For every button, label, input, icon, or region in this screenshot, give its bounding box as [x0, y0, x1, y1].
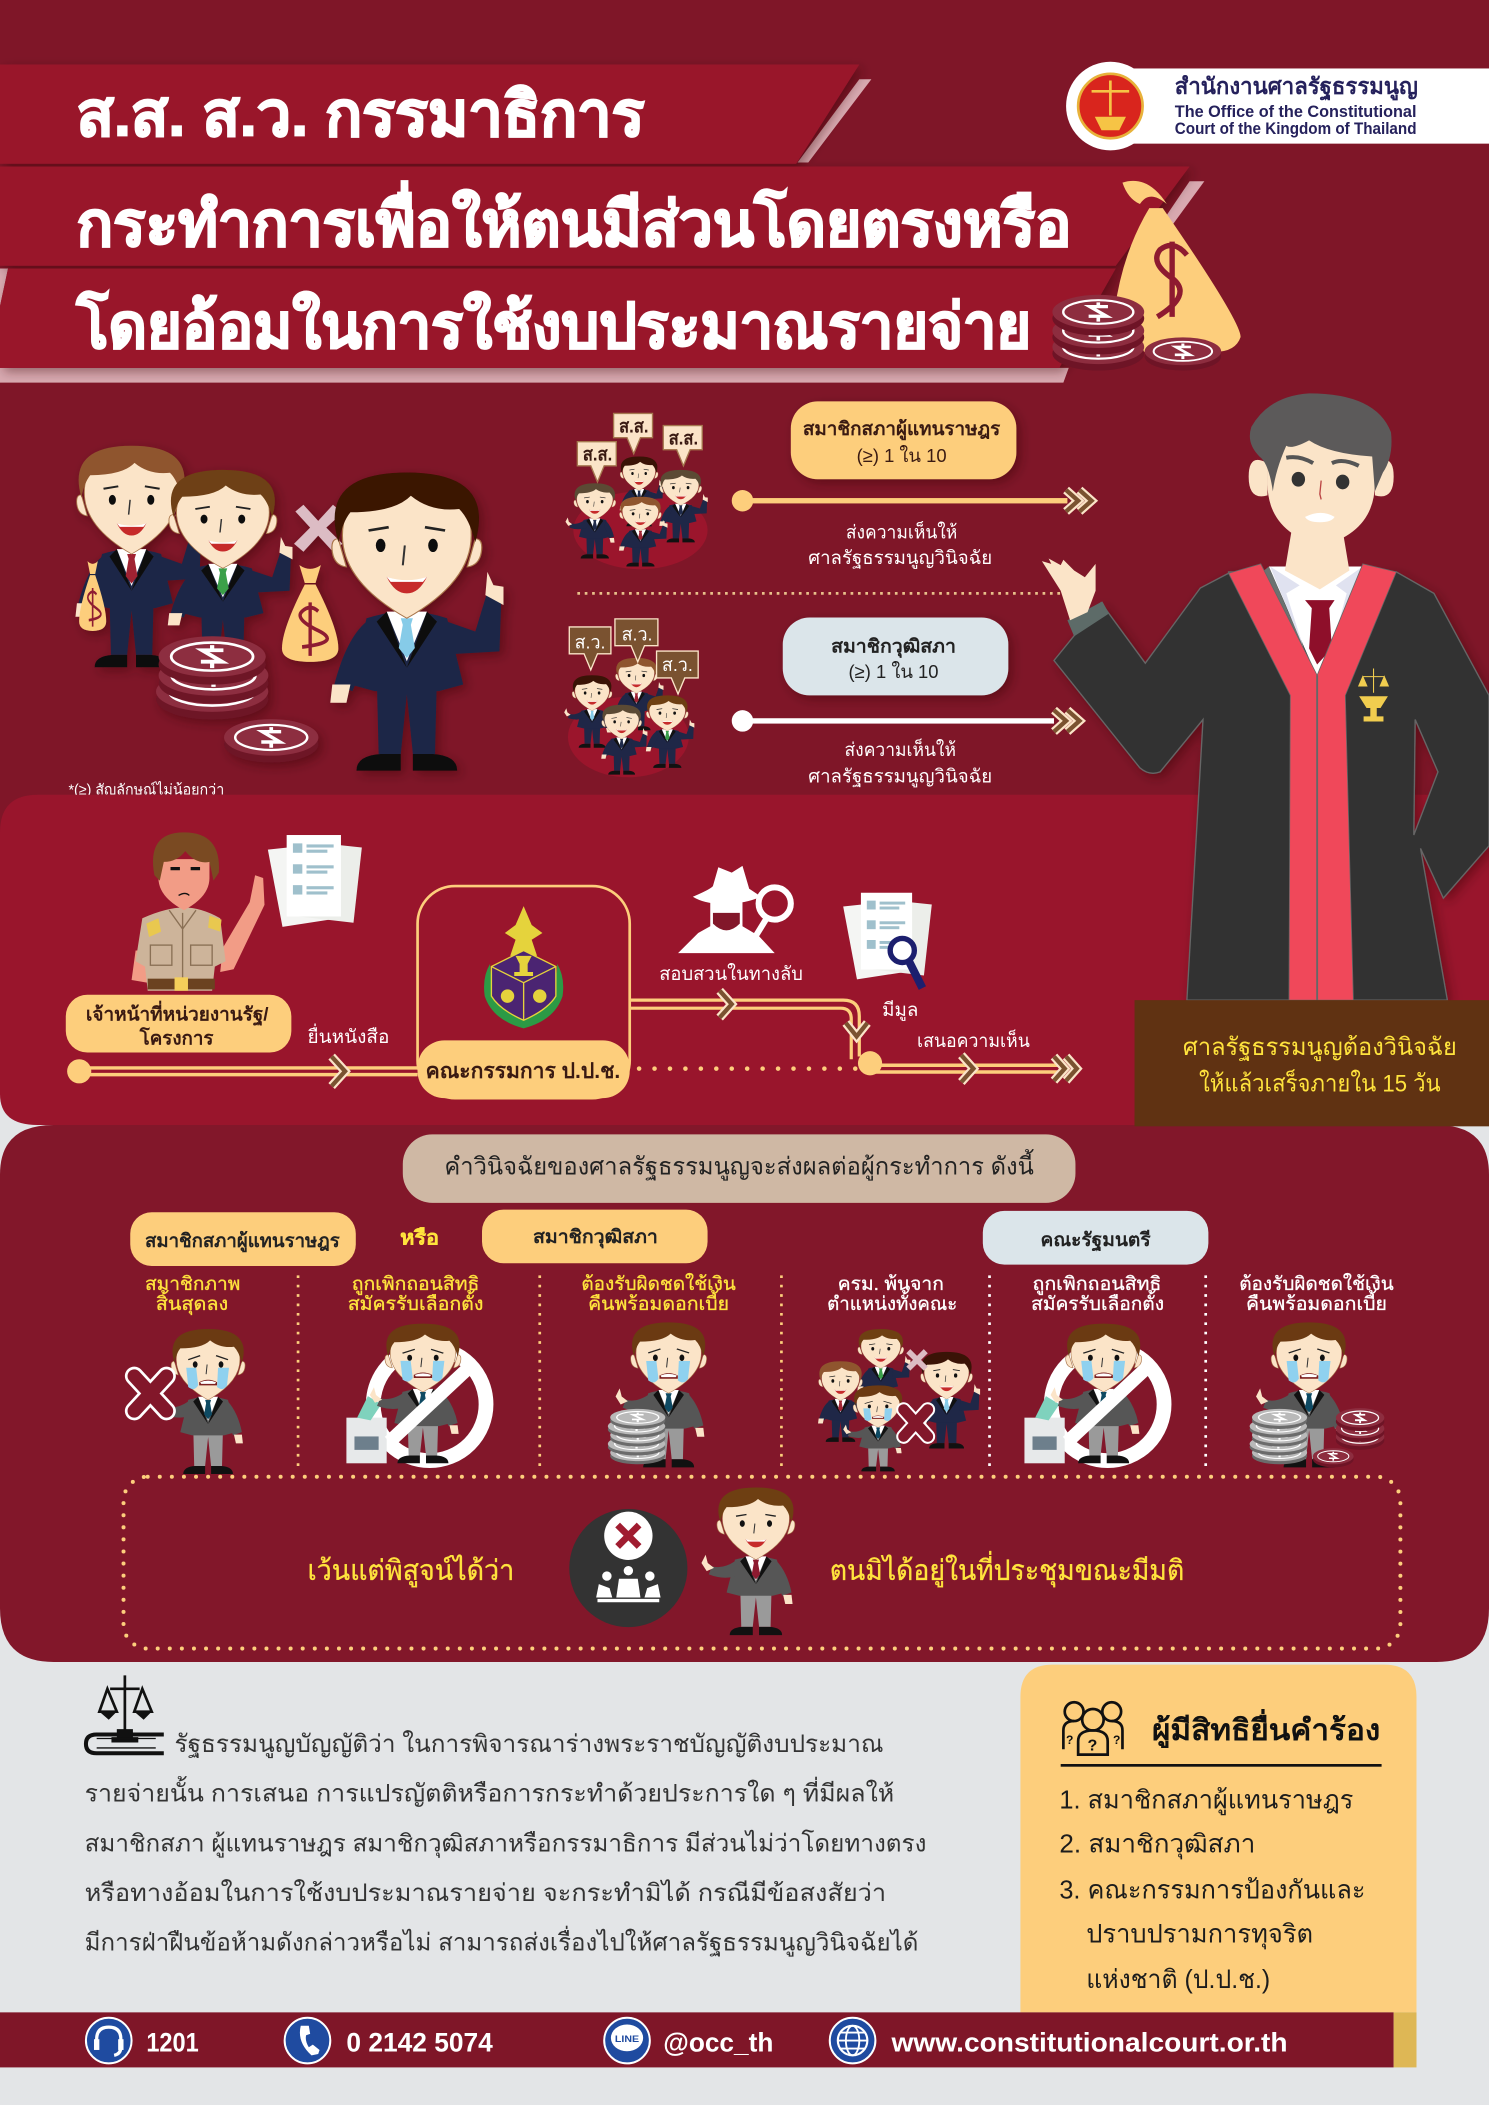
- text: submit opinion: ส่งความเห็นให้: [846, 519, 957, 542]
- icon: people with question marks: ?: [1088, 1737, 1097, 1755]
- text: submit opinion: [808, 737, 992, 788]
- ban ring and ballot box: [346, 1348, 486, 1463]
- pill: representatives: [791, 401, 1016, 479]
- consequence: election rights revoked: ถูกเพิกถอนสิทธิ: [1032, 1273, 1161, 1295]
- grey coin stack: [1250, 1409, 1307, 1464]
- callout: 15 day deadline: ศาลรัฐธรรมนูญต้องวินิจฉัย: [1183, 1034, 1457, 1062]
- exception text right: ตนมิได้อยู่ในที่ประชุมขณะมีมติ: [830, 1551, 1184, 1588]
- bandage cross: [904, 1410, 928, 1436]
- court emblem on gown: [1359, 669, 1388, 721]
- pill: senators: (≥) 1 ใน 10: [849, 661, 939, 682]
- arrow: to court: [858, 1051, 1077, 1082]
- crying man: [616, 1322, 707, 1467]
- list of petitioners: 2. สมาชิกวุฒิสภา: [1059, 1831, 1255, 1860]
- tag ส.ว.: ส.ว.: [622, 623, 653, 644]
- text: submit opinion: ส่งความเห็นให้: [845, 737, 956, 760]
- crying man: [1256, 1322, 1347, 1467]
- logo: Office of the Constitutional Court: The Office of the Constitutional: [1175, 102, 1416, 121]
- consequence: repay with interest: ต้องรับผิดชดใช้เงิน: [1239, 1273, 1394, 1294]
- icon: money bag: [1110, 181, 1241, 352]
- pill: representatives: สมาชิกสภาผู้แทนราษฎร: [803, 418, 1001, 441]
- pink cross: [294, 505, 342, 552]
- consequence: repay with interest: คืนพร้อมดอกเบี้ย: [588, 1290, 729, 1314]
- logo: Office of the Constitutional Court: [1066, 62, 1489, 150]
- tag ส.ว.: [569, 627, 611, 670]
- list of petitioners: 1. สมาชิกสภาผู้แทนราษฎร: [1059, 1786, 1353, 1815]
- text: has grounds: มีมูล: [882, 999, 918, 1021]
- consequence: cabinet removed: ตำแหน่งทั้งคณะ: [827, 1290, 957, 1314]
- officer arms: [132, 875, 265, 983]
- group of ministers: [857, 1329, 910, 1410]
- consequence: repay with interest: ต้องรับผิดชดใช้เงิน: [581, 1273, 736, 1294]
- title line 1: ส.ส. ส.ว. กรรมาธิการ: [77, 81, 644, 150]
- banner shapes: [0, 64, 1190, 368]
- icon: people with question marks: [1063, 1702, 1122, 1755]
- icon: people with question marks: ?: [1066, 1733, 1073, 1747]
- judge ears: [1249, 460, 1394, 496]
- officer head: [158, 859, 209, 910]
- icon: scales on book: [86, 1675, 164, 1753]
- line account: @occ_th: [663, 2027, 773, 2057]
- hotline: 1201: [146, 2027, 199, 2057]
- phone: [285, 2018, 493, 2063]
- arrow: submit letter: [67, 1057, 418, 1086]
- pill: officer label: [66, 995, 291, 1052]
- judge face: [1267, 430, 1375, 546]
- consequence: membership ends: สมาชิกภาพ: [145, 1273, 240, 1294]
- icon: detective: [678, 866, 791, 953]
- footer bar: [0, 2012, 1416, 2067]
- title banner: [0, 64, 1204, 383]
- list of petitioners: ปราบปรามการทุจริต: [1086, 1921, 1313, 1950]
- heading pill: consequences: [403, 1134, 1075, 1203]
- arrow: investigation path: [630, 991, 867, 1059]
- consequence: membership ends: [134, 1273, 245, 1474]
- man with green tie: [168, 470, 292, 671]
- ban ring and ballot box: [1024, 1348, 1164, 1463]
- text: secret investigation: สอบสวนในทางลับ: [659, 963, 803, 984]
- line account: [604, 2018, 773, 2063]
- callout: exception: [124, 1477, 1400, 1649]
- pink cross: [906, 1349, 928, 1371]
- panel: process flow: [0, 795, 1489, 1125]
- tag ส.ส.: [614, 413, 653, 454]
- tag ส.ว.: [615, 619, 658, 662]
- consequence: election rights revoked: [346, 1273, 486, 1463]
- heading pill: consequences: คำวินิจฉัยของศาลรัฐธรรมนูญจะส่งผลต่อผู้กระทำการ ดังนี้: [444, 1149, 1034, 1182]
- pill: senators: [783, 618, 1008, 695]
- illustration: politicians taking budget: [75, 446, 503, 771]
- NACC emblem: [484, 906, 563, 1028]
- icon: people with question marks: ?: [1113, 1733, 1120, 1747]
- ban slash: [1067, 1367, 1148, 1442]
- pill: representatives: (≥) 1 ใน 10: [857, 445, 947, 466]
- pill: officer label: โครงการ: [139, 1026, 214, 1048]
- icon: documents with magnifier: [843, 893, 932, 988]
- banner accent strips: [0, 79, 1204, 383]
- consequence: repay with interest: [1239, 1273, 1394, 1467]
- consequence: membership ends: สิ้นสุดลง: [156, 1290, 228, 1316]
- pill: senators: สมาชิกวุฒิสภา: [831, 635, 956, 658]
- exception text left: เว้นแต่พิสูจน์ได้ว่า: [307, 1554, 514, 1588]
- man with red tie: [75, 446, 202, 667]
- judge red stole: [1229, 564, 1396, 1000]
- judge facial features: [1286, 457, 1359, 522]
- ban slash: [389, 1367, 470, 1442]
- phone: 0 2142 5074: [346, 2027, 493, 2057]
- arrow: representatives to court: [732, 490, 1092, 511]
- tag ส.ว.: ส.ว.: [575, 631, 606, 652]
- documents: [268, 835, 362, 927]
- tag ส.ส.: ส.ส.: [583, 443, 612, 464]
- judge neck: [1285, 530, 1349, 589]
- consequence: repay with interest: คืนพร้อมดอกเบี้ย: [1246, 1290, 1387, 1314]
- NACC box: [418, 886, 630, 1098]
- logo: Office of the Constitutional Court: สำนักงานศาลรัฐธรรมนูญ: [1175, 73, 1418, 101]
- title line 2: กระทำการเพื่อให้ตนมีส่วนโดยตรงหรือ: [77, 181, 1071, 260]
- bag held by first man: [79, 561, 106, 631]
- consequence: cabinet removed: [818, 1273, 980, 1471]
- judge gown: [1054, 572, 1489, 1000]
- consequence: election rights revoked: สมัครรับเลือกตั้ง: [348, 1290, 483, 1314]
- panel: consequences: [0, 1125, 1489, 1662]
- red coin stack: [1313, 1408, 1384, 1467]
- tag ส.ว.: [657, 651, 698, 694]
- consequence: cabinet removed: ครม. พ้นจาก: [838, 1273, 944, 1294]
- judge shirt and collar: [1269, 567, 1363, 677]
- text: or: หรือ: [400, 1226, 439, 1249]
- officer uniform: [136, 908, 226, 991]
- crying man: [1051, 1324, 1142, 1463]
- judge: [1042, 393, 1489, 1000]
- crying man: [370, 1324, 461, 1463]
- uniform details: [146, 910, 222, 991]
- group: house representatives: [565, 413, 708, 569]
- panel: petitioners: [1020, 1665, 1416, 2012]
- text block: constitution provision: มีการฝ่าฝืนข้อห้ามดังกล่าวหรือไม่ สามารถส่งเรื่องไปให้ศาลรัฐธรรมนูญวินิจฉัยได้: [85, 1926, 918, 1958]
- text: submit letter: ยื่นหนังสือ: [307, 1023, 389, 1047]
- judge cuff and hand: [1067, 601, 1109, 636]
- money bag: [282, 565, 338, 662]
- list of petitioners: แห่งชาติ (ป.ป.ช.): [1086, 1966, 1270, 1994]
- text block: constitution provision: หรือทางอ้อมในการใช้งบประมาณรายจ่าย จะกระทำมิได้ กรณีมีข้อสงสัยว่า: [85, 1879, 886, 1907]
- pill: cabinet: คณะรัฐมนตรี: [1041, 1229, 1152, 1252]
- consequence: election rights revoked: ถูกเพิกถอนสิทธิ: [352, 1273, 479, 1295]
- coin stack: [156, 636, 318, 763]
- arrow: senators to court: [732, 710, 1079, 732]
- callout: 15 day deadline: [1135, 1000, 1489, 1125]
- main man with blue tie: [330, 473, 503, 771]
- officer with documents: [132, 832, 362, 991]
- pill: officer label: เจ้าหน้าที่หน่วยงานรัฐ/: [86, 1000, 269, 1026]
- text: submit opinion: ศาลรัฐธรรมนูญวินิจฉัย: [808, 766, 992, 788]
- consequence: repay with interest: [581, 1273, 736, 1467]
- callout: 15 day deadline: ให้แล้วเสร็จภายใน 15 วัน: [1199, 1067, 1441, 1097]
- man: [701, 1487, 795, 1635]
- consequence: election rights revoked: สมัครรับเลือกตั้ง: [1031, 1290, 1164, 1314]
- pill: representatives: [130, 1212, 356, 1266]
- consequence: election rights revoked: [1024, 1273, 1164, 1463]
- tag ส.ส.: ส.ส.: [669, 427, 698, 448]
- NACC label pill: คณะกรรมการ ป.ป.ช.: [426, 1059, 620, 1083]
- tag ส.ส.: [577, 442, 616, 482]
- title line 3: โดยอ้อมในการใช้งบประมาณรายจ่าย: [76, 290, 1031, 362]
- text: present opinion: เสนอความเห็น: [917, 1028, 1030, 1051]
- group: senators: [564, 619, 698, 777]
- coin stack: [608, 1409, 665, 1464]
- footnote: *(≥) สัญลักษณ์ไม่น้อยกว่า: [68, 781, 224, 799]
- panel: top maroon area: [0, 0, 1489, 832]
- tag ส.ส.: [663, 426, 702, 466]
- list of petitioners: [1059, 1786, 1365, 1994]
- text block: constitution provision: รัฐธรรมนูญบัญญัติว่า ในการพิจารณาร่างพระราชบัญญัติงบประมาณ: [175, 1730, 883, 1759]
- brown strip above consequences: [1135, 1116, 1489, 1126]
- NACC label pill: [418, 1040, 630, 1098]
- list of petitioners: 3. คณะกรรมการป้องกันและ: [1059, 1876, 1365, 1904]
- text block: constitution provision: รายจ่ายนั้น การเสนอ การแปรญัตติหรือการกระทำด้วยประการใด ๆ ที่มีผลให้: [85, 1776, 894, 1808]
- pill: senators: [482, 1210, 708, 1263]
- tag ส.ว.: ส.ว.: [662, 654, 693, 675]
- bandage cross: [134, 1376, 166, 1411]
- judge hair: [1250, 393, 1392, 491]
- text: submit opinion: [808, 519, 992, 569]
- website: [830, 2018, 1288, 2063]
- website: www.constitutionalcourt.or.th: [890, 2027, 1288, 2057]
- heading: petitioners: ผู้มีสิทธิยื่นคำร้อง: [1152, 1709, 1380, 1748]
- hotline: [86, 2018, 199, 2063]
- icon: no meeting: [569, 1509, 687, 1627]
- text block: constitution provision: [85, 1730, 926, 1958]
- pill: cabinet: [983, 1211, 1208, 1265]
- tag ส.ส.: ส.ส.: [619, 415, 649, 436]
- text block: constitution provision: สมาชิกสภา ผู้แทนราษฎร สมาชิกวุฒิสภาหรือกรรมาธิการ มีส่วนไม่ว่าโดยทางตรง: [85, 1829, 926, 1858]
- logo: Office of the Constitutional Court: Court of the Kingdom of Thailand: [1175, 119, 1416, 138]
- text: submit opinion: ศาลรัฐธรรมนูญวินิจฉัย: [808, 547, 992, 569]
- dotted link: [639, 1067, 857, 1070]
- line account: LINE: [615, 2033, 639, 2044]
- pill: senators: สมาชิกวุฒิสภา: [533, 1226, 658, 1249]
- crying man: [156, 1329, 245, 1474]
- icon: coins: [1052, 295, 1221, 371]
- pill: representatives: สมาชิกสภาผู้แทนราษฎร: [145, 1230, 341, 1253]
